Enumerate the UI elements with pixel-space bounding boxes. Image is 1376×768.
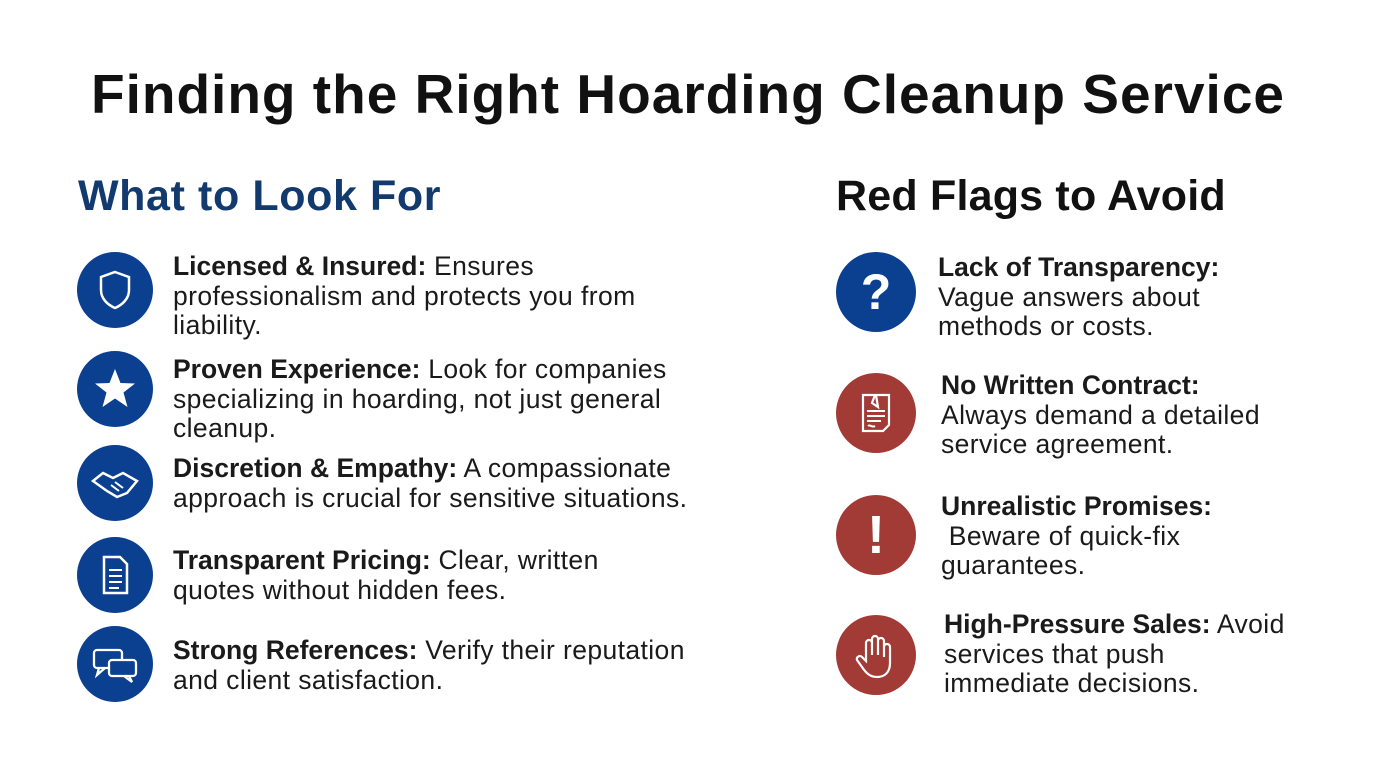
text: transparency: Vague answers about xyxy=(938,282,1200,312)
text: references: and client satisfaction. xyxy=(173,664,443,694)
text: pressure xyxy=(944,609,1285,698)
text: discretion: Discretion & Empathy: A compassionate xyxy=(173,453,671,483)
icon: star xyxy=(77,351,153,427)
text: transparency: methods or costs. xyxy=(938,311,1154,341)
icon: shield xyxy=(77,252,153,328)
panel: red flags xyxy=(836,252,1285,698)
text: experience: Proven Experience: Look for companies xyxy=(173,354,667,384)
text: pressure: immediate decisions. xyxy=(944,668,1199,698)
text: references: Strong References: Verify their reputation xyxy=(173,635,685,665)
icon: hand xyxy=(836,615,916,695)
text: transparency xyxy=(938,252,1219,341)
text: experience: specializing in hoarding, not just general xyxy=(173,384,661,414)
text: promises: Unrealistic Promises: xyxy=(941,491,1212,521)
text: promises: guarantees. xyxy=(941,550,1085,580)
text: promises xyxy=(941,491,1212,580)
text: pricing: Transparent Pricing: Clear, written xyxy=(173,545,599,575)
icon: question: ? xyxy=(861,264,891,320)
icon: exclamation xyxy=(836,495,916,575)
text: experience: cleanup. xyxy=(173,413,276,443)
text: licensed xyxy=(173,251,636,340)
text: contract: Always demand a detailed xyxy=(941,400,1260,430)
text: pricing: quotes without hidden fees. xyxy=(173,574,506,604)
text: discretion: approach is crucial for sensitive situations. xyxy=(173,482,687,512)
icon: exclamation: ! xyxy=(867,505,885,565)
text: licensed: professionalism and protects you from xyxy=(173,280,636,310)
text: licensed: liability. xyxy=(173,310,262,340)
text: pressure: services that push xyxy=(944,638,1165,668)
text: licensed: Licensed & Insured: Ensures xyxy=(173,251,534,281)
icon: torn contract xyxy=(836,373,916,453)
text: pricing xyxy=(173,545,599,604)
text: discretion xyxy=(173,453,687,512)
text: references xyxy=(173,635,685,694)
title: Finding the Right Hoarding Cleanup Service xyxy=(91,63,1285,125)
panel: what to look for xyxy=(77,251,687,702)
text: experience xyxy=(173,354,667,443)
text: promises: Beware of quick-fix xyxy=(949,520,1180,550)
icon: handshake xyxy=(77,445,153,521)
text: pressure: High-Pressure Sales: Avoid xyxy=(944,609,1285,639)
text: transparency: Lack of Transparency: xyxy=(938,252,1219,282)
text: contract: service agreement. xyxy=(941,429,1174,459)
icon: document xyxy=(77,537,153,613)
icon: chat xyxy=(77,626,153,702)
heading: what to look for: What to Look For xyxy=(78,172,441,220)
text: contract: No Written Contract: xyxy=(941,370,1200,400)
icon: question xyxy=(836,252,916,332)
text: contract xyxy=(941,370,1260,459)
heading: red flags: Red Flags to Avoid xyxy=(836,172,1226,220)
